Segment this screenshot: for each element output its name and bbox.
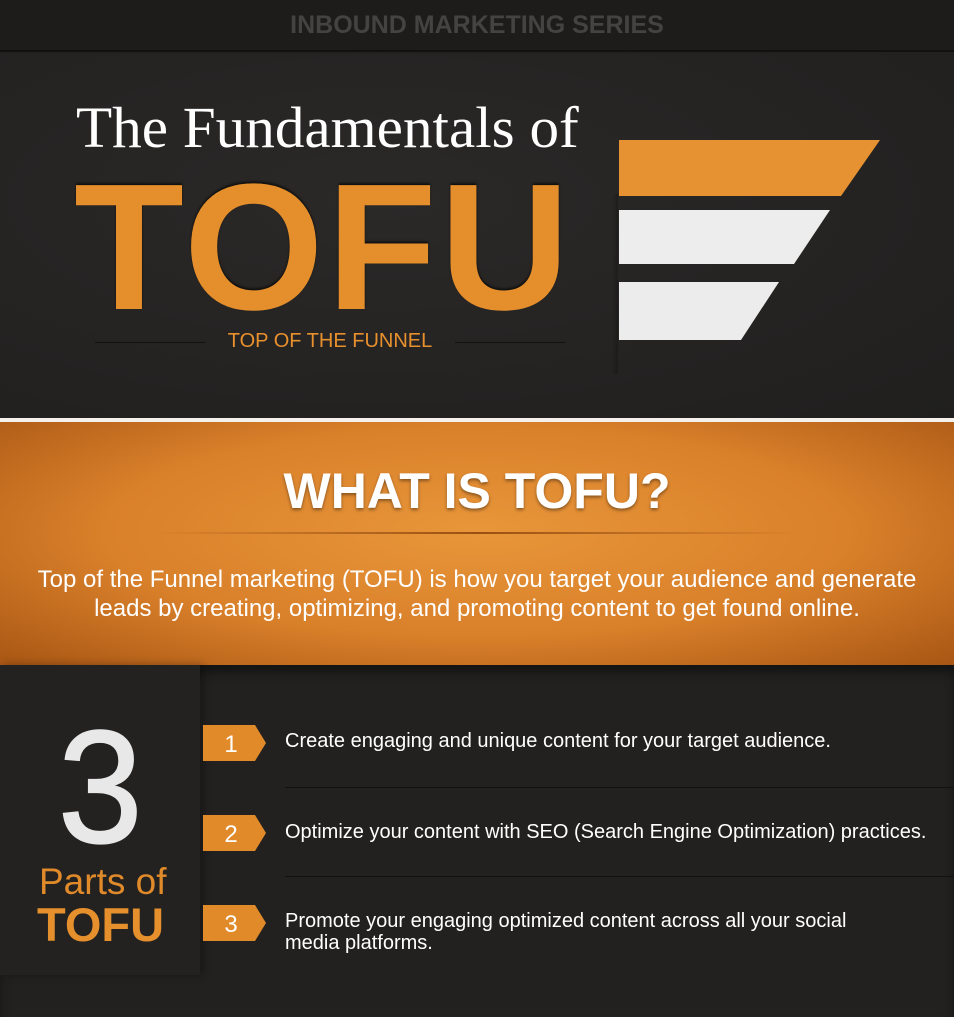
text 1: Create engaging and unique content for your target audience. bbox=[285, 730, 831, 752]
item 1 bbox=[203, 725, 831, 761]
big 3: 3 bbox=[58, 697, 143, 876]
badge 3 bbox=[203, 905, 266, 941]
TOFU small: TOFU bbox=[37, 898, 164, 951]
text 3: Promote your engaging optimized content across all your social bbox=[285, 910, 846, 932]
Parts of: Parts of bbox=[39, 861, 166, 902]
title: The Fundamentals of: The Fundamentals of bbox=[76, 95, 579, 160]
three parts section bbox=[0, 665, 954, 1017]
description bbox=[38, 566, 916, 622]
description: Top of the Funnel marketing (TOFU) is how you target your audience and generate bbox=[38, 566, 916, 593]
badge 1 bbox=[203, 725, 266, 761]
title: TOFU: TOFU bbox=[74, 147, 573, 348]
series label: INBOUND MARKETING SERIES bbox=[290, 11, 664, 39]
badge 2: 2 bbox=[224, 821, 238, 848]
heading: WHAT IS TOFU? bbox=[284, 463, 670, 519]
panel edge shadow bbox=[612, 194, 618, 374]
header band bbox=[0, 0, 954, 52]
item 3 bbox=[203, 905, 846, 954]
badge 3: 3 bbox=[224, 911, 238, 938]
what is tofu panel bbox=[0, 422, 954, 665]
item 2 bbox=[203, 815, 926, 851]
description: leads by creating, optimizing, and promoting content to get found online. bbox=[94, 595, 860, 622]
heading underline bbox=[150, 532, 804, 534]
subtitle: TOP OF THE FUNNEL bbox=[228, 330, 432, 352]
left panel: 3 Parts of TOFU bbox=[0, 665, 200, 975]
text 3 bbox=[285, 910, 846, 954]
text 2: Optimize your content with SEO (Search Engine Optimization) practices. bbox=[285, 821, 926, 843]
badge 1: 1 bbox=[224, 731, 238, 758]
hero section bbox=[0, 54, 954, 418]
white separator bbox=[0, 418, 954, 422]
badge 2 bbox=[203, 815, 266, 851]
funnel stripes icon bbox=[619, 140, 880, 340]
text 3: media platforms. bbox=[285, 932, 433, 954]
